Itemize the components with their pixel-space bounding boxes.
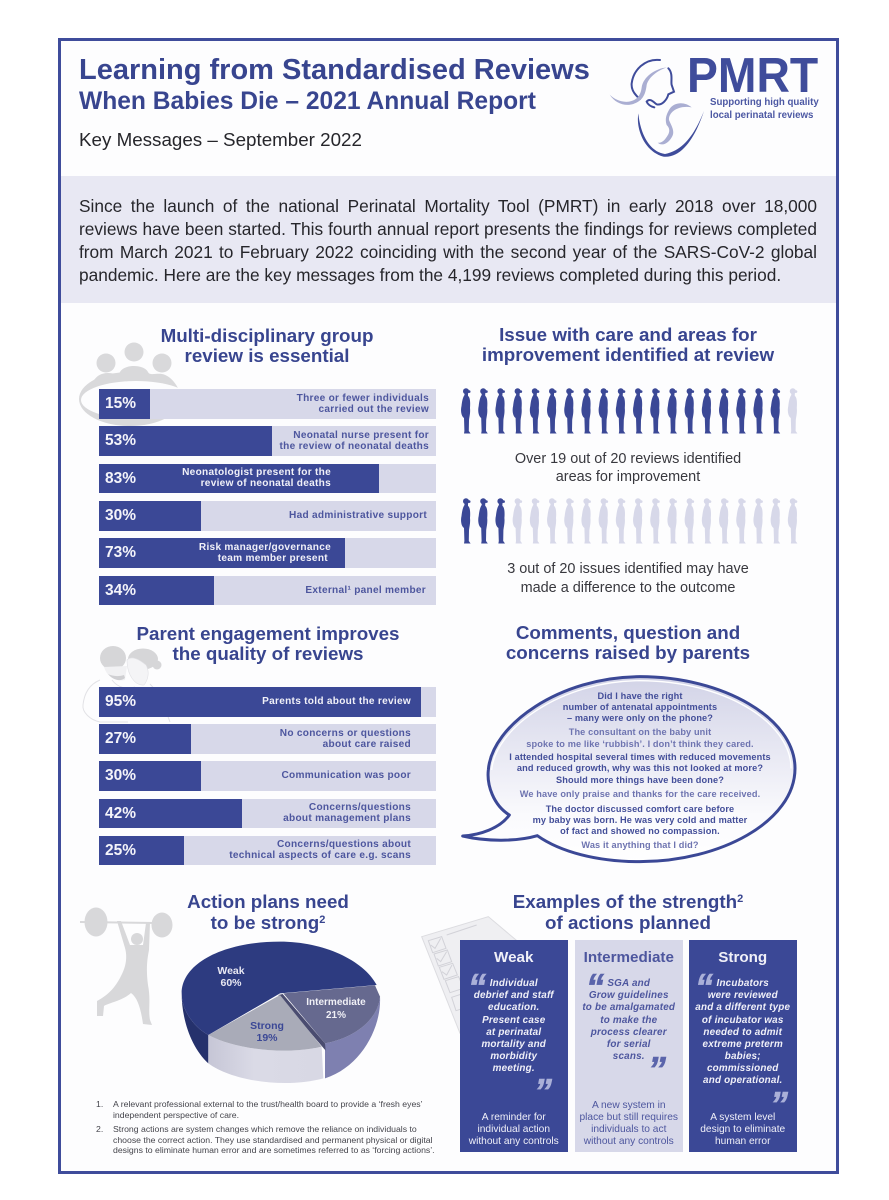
example text xyxy=(474,978,554,1074)
bar: 42%: about management plans xyxy=(283,813,411,824)
example text: process clearer xyxy=(591,1027,667,1038)
bar: 27% xyxy=(99,724,436,754)
example text xyxy=(695,978,790,1086)
bar: 15%: Three or fewer individuals xyxy=(297,393,429,404)
bar: 83% xyxy=(99,464,436,493)
icon: mother and baby line drawing xyxy=(610,58,704,157)
example text: extreme preterm xyxy=(703,1039,783,1050)
heading: action plans: to be strong2 xyxy=(211,912,325,932)
subtitle: Key Messages – September 2022 xyxy=(79,129,362,150)
parent comments: The doctor discussed comfort care before xyxy=(546,804,734,814)
parent comments: Was it anything that I did? xyxy=(581,840,699,850)
strength description: individuals to act xyxy=(591,1124,666,1135)
speech bubble xyxy=(461,675,796,864)
parent comments: of fact and showed no compassion. xyxy=(560,826,720,836)
intro panel xyxy=(61,176,836,303)
example text: of incubator was xyxy=(702,1015,784,1026)
caption: areas for improvement: Over 19 out of 20 reviews identified xyxy=(515,450,741,466)
example text: needed to admit xyxy=(703,1027,782,1038)
strength description: individual action xyxy=(478,1124,550,1135)
example text: Present case xyxy=(482,1015,545,1026)
panel title: Intermediate xyxy=(584,949,674,966)
bar: 34% xyxy=(99,576,436,605)
example text: scans. xyxy=(613,1051,645,1062)
footnote 2: choose the correct action. They use standardised and permanent physical or digital xyxy=(113,1135,433,1145)
example text: at perinatal xyxy=(486,1027,541,1038)
bar: 30% xyxy=(99,501,436,530)
opening quote mark: “ xyxy=(468,966,486,1007)
parent comments: We have only praise and thanks for the care received. xyxy=(520,789,760,799)
logo strapline xyxy=(710,97,819,120)
example text: morbidity xyxy=(490,1051,537,1062)
heading: comments: concerns raised by parents xyxy=(506,642,750,663)
footnotes xyxy=(96,1099,435,1155)
bar: 34%: External¹ panel member xyxy=(305,585,426,596)
example text: commissioned xyxy=(707,1063,779,1074)
heading: issue with care xyxy=(482,324,774,365)
parent comments: Did I have the right xyxy=(597,691,683,701)
example text: education. xyxy=(488,1002,539,1013)
heading: parent engagement: Parent engagement improves xyxy=(136,623,400,644)
bar: 15%: 15% xyxy=(105,395,136,412)
title xyxy=(79,54,590,115)
heading: comments: Comments, question and xyxy=(516,622,740,643)
footnote 1: A relevant professional external to the trust/health board to provide a ‘fresh eyes’ xyxy=(113,1099,423,1109)
bar: 25%: Concerns/questions about xyxy=(277,839,411,850)
intro text: from March 2021 to February 2022 coinciding with the second year of the SARS-CoV-2 global xyxy=(79,242,817,262)
heading: issue with care: improvement identified at review xyxy=(482,344,774,365)
footnote 2 xyxy=(96,1124,435,1155)
bar: 53%: 53% xyxy=(105,432,136,449)
bar: 42%: 42% xyxy=(105,804,136,822)
panel title: Weak xyxy=(494,949,533,966)
heading: parent engagement: the quality of reviews xyxy=(172,643,364,664)
bar: 25%: 25% xyxy=(105,842,136,858)
parent comments: my baby was born. He was very cold and matter xyxy=(533,815,747,825)
label: weak xyxy=(217,965,245,989)
intro text: reviews have been started. This fourth annual report presents the findings for reviews completed xyxy=(79,218,817,238)
bar: 53%: the review of neonatal deaths xyxy=(280,441,429,452)
bar: 30%: Communication was poor xyxy=(281,770,411,781)
panel: weak xyxy=(460,940,568,1152)
heading: parent engagement xyxy=(136,623,400,664)
strength description xyxy=(700,1112,785,1147)
pictogram: 3 of 20 figures xyxy=(461,498,798,544)
caption: difference to outcome: made a difference to the outcome xyxy=(521,580,735,596)
intro text xyxy=(79,196,817,284)
bar: 30%: 30% xyxy=(105,507,136,524)
bar: 73%: team member present xyxy=(218,553,328,564)
example text xyxy=(582,978,676,1062)
strength description: A new system in xyxy=(592,1100,666,1111)
parent comments: and reduced growth, why was this not looked at more? xyxy=(517,763,763,773)
strength description xyxy=(468,1112,559,1147)
label: intermediate: 21% xyxy=(326,1010,346,1020)
footnote 2: designs to eliminate human error and are sometimes referred to as ‘forcing actions’. xyxy=(113,1145,435,1155)
example text: and a different type xyxy=(695,1002,790,1013)
example text: Individual xyxy=(490,978,538,989)
bar: 15%: carried out the review xyxy=(318,404,429,415)
example text: mortality and xyxy=(481,1039,546,1050)
parent comments: number of antenatal appointments xyxy=(563,702,717,712)
bar: 73%: 73% xyxy=(105,544,136,561)
bar chart: parent engagement xyxy=(99,687,436,865)
intro text: pandemic. Here are the key messages from the 4,199 reviews completed during this period. xyxy=(79,264,781,284)
example text: for serial xyxy=(607,1039,651,1050)
example text: and operational. xyxy=(703,1075,782,1086)
bar: 25%: technical aspects of care e.g. scans xyxy=(229,850,411,861)
bar: 83%: 83% xyxy=(105,470,136,486)
bar: 73% xyxy=(99,538,436,568)
bar: 30%: 30% xyxy=(105,767,136,784)
heading: examples of strength xyxy=(513,891,743,933)
label: intermediate: Intermediate xyxy=(306,997,366,1008)
caption: areas for improvement xyxy=(515,450,741,485)
footnote 1: independent perspective of care. xyxy=(113,1110,239,1120)
parent comments: Should more things have been done? xyxy=(556,775,724,785)
caption: difference to outcome xyxy=(507,561,749,596)
bar: 53%: Neonatal nurse present for xyxy=(293,430,429,441)
bar: 42%: Concerns/questions xyxy=(309,802,411,813)
example text: SGA and xyxy=(607,978,650,989)
parent comments xyxy=(509,691,771,850)
PMRT logo xyxy=(610,49,819,157)
heading: multi-disciplinary: Multi-disciplinary group xyxy=(161,325,373,346)
bubble shape xyxy=(461,675,796,864)
footnote 2: 2. xyxy=(96,1124,103,1134)
panel title: Strong xyxy=(718,949,767,966)
opening quote mark: “ xyxy=(586,966,604,1007)
closing quote mark: ” xyxy=(770,1084,788,1125)
example text: to make the xyxy=(600,1015,657,1026)
heading: comments xyxy=(506,622,750,663)
bar: 27%: No concerns or questions xyxy=(280,728,411,739)
bar chart: multi-disciplinary review xyxy=(99,389,436,605)
caption: areas for improvement: areas for improvement xyxy=(556,469,700,485)
label: strong xyxy=(250,1020,284,1044)
footnote 2: Strong actions are system changes which remove the reliance on individuals to xyxy=(113,1124,417,1134)
parent comments: spoke to me like ‘rubbish’. I don’t think they cared. xyxy=(526,739,754,749)
bar: 27%: about care raised xyxy=(323,739,411,750)
pictogram: 19 of 20 figures xyxy=(461,388,798,434)
heading: examples of strength: of actions planned xyxy=(545,912,711,932)
opening quote mark: “ xyxy=(695,966,713,1007)
label: intermediate xyxy=(306,997,366,1020)
strength description: design to eliminate xyxy=(700,1124,785,1135)
closing quote mark: ” xyxy=(534,1071,552,1112)
heading: multi-disciplinary: review is essential xyxy=(185,345,349,366)
strength description: A reminder for xyxy=(482,1112,546,1123)
bar: 83%: Neonatologist present for the xyxy=(182,467,331,478)
logo strapline: Supporting high quality xyxy=(710,97,819,108)
bar: 73%: Risk manager/governance xyxy=(199,542,331,553)
strength description: human error xyxy=(715,1136,770,1147)
panel: strong xyxy=(689,940,796,1152)
bar: 15% xyxy=(99,389,436,418)
bar: 34%: 34% xyxy=(105,582,136,598)
bar: 95% xyxy=(99,687,436,716)
strength description: without any controls xyxy=(584,1136,674,1147)
bar: 27%: 27% xyxy=(105,730,136,747)
example text: were reviewed xyxy=(708,990,778,1001)
bar: 53% xyxy=(99,426,436,456)
pie chart: action plan strength xyxy=(182,942,380,1083)
parent comments: I attended hospital several times with reduced movements xyxy=(509,752,771,762)
label: strong: 19% xyxy=(256,1032,278,1044)
bar: 30% xyxy=(99,761,436,790)
label: weak: Weak xyxy=(217,965,245,977)
bar: 42% xyxy=(99,798,436,828)
heading: examples of strength: Examples of the strength2 xyxy=(513,891,743,912)
strength description: place but still requires xyxy=(579,1112,678,1123)
heading: action plans xyxy=(187,891,349,933)
strength description xyxy=(579,1100,678,1147)
title: Learning from Standardised Reviews xyxy=(79,54,590,86)
label: strong: Strong xyxy=(250,1020,284,1032)
bar: 25% xyxy=(99,836,436,865)
example text: meeting. xyxy=(493,1063,535,1074)
parent comments: The consultant on the baby unit xyxy=(569,727,711,737)
example text: babies; xyxy=(725,1051,761,1062)
example text: to be amalgamated xyxy=(582,1002,675,1013)
intro text: Since the launch of the national Perinatal Mortality Tool (PMRT) in early 2018 over 18,000 xyxy=(79,196,817,216)
heading: issue with care: Issue with care and areas for xyxy=(499,324,757,345)
bar: 95%: Parents told about the review xyxy=(262,696,411,707)
icon: checklist xyxy=(421,916,516,1034)
parent comments: – many were only on the phone? xyxy=(567,713,713,723)
3D pie slices xyxy=(182,942,380,1083)
closing quote mark: ” xyxy=(648,1049,666,1090)
logo wordmark: PMRT xyxy=(687,49,818,103)
label: weak: 60% xyxy=(220,977,242,989)
example text: debrief and staff xyxy=(474,990,554,1001)
bar: 95%: 95% xyxy=(105,693,136,710)
bar: 30%: Had administrative support xyxy=(289,510,427,521)
strength description: A system level xyxy=(710,1112,775,1123)
bar: 83%: review of neonatal deaths xyxy=(201,478,331,489)
strength description: without any controls xyxy=(469,1136,559,1147)
footnote 1 xyxy=(96,1099,423,1120)
heading: action plans: Action plans need xyxy=(187,891,349,912)
panel: intermediate xyxy=(575,940,682,1152)
logo strapline: local perinatal reviews xyxy=(710,110,813,120)
caption: difference to outcome: 3 out of 20 issues identified may have xyxy=(507,561,749,577)
footnote 1: 1. xyxy=(96,1099,103,1109)
example text: Incubators xyxy=(716,978,769,989)
heading: multi-disciplinary xyxy=(161,325,373,366)
title: When Babies Die – 2021 Annual Report xyxy=(79,88,536,115)
example text: Grow guidelines xyxy=(589,990,669,1001)
